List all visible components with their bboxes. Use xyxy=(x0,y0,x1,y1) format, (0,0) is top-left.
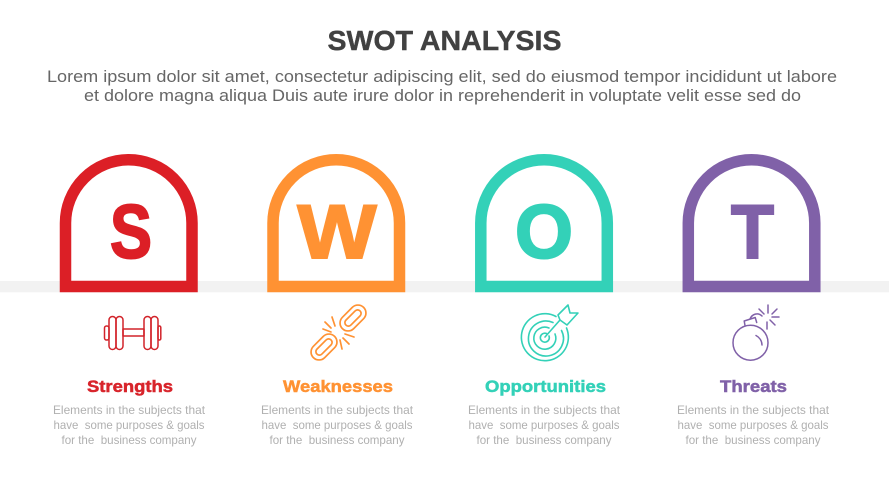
description: Threats: have some purposes & goals xyxy=(678,418,828,432)
panel: weaknesses xyxy=(261,160,414,447)
arch frame: W xyxy=(273,160,400,286)
description: Weaknesses: for the business company xyxy=(270,433,404,447)
icon: bomb xyxy=(733,305,779,360)
letter S: S xyxy=(110,190,152,275)
letter W: W xyxy=(298,190,377,275)
heading: Opportunities: Opportunities xyxy=(485,378,606,396)
description: Opportunities xyxy=(468,403,621,447)
description: Strengths xyxy=(53,403,206,447)
panel: strengths xyxy=(53,160,206,447)
panel: opportunities xyxy=(468,160,621,447)
description: Weaknesses: have some purposes & goals xyxy=(262,418,412,432)
description: Threats: for the business company xyxy=(686,433,820,447)
description: Strengths: for the business company xyxy=(62,433,196,447)
description: Opportunities: for the business company xyxy=(476,433,612,447)
heading: Threats: Threats xyxy=(720,378,787,396)
icon: target with arrow xyxy=(521,305,578,361)
description: Strengths: have some purposes & goals xyxy=(54,418,204,432)
arch frame: S xyxy=(66,160,192,286)
description: Threats: Elements in the subjects that xyxy=(677,403,830,417)
description: Strengths: Elements in the subjects that xyxy=(53,403,206,417)
subtitle text block xyxy=(47,68,837,105)
description: Threats xyxy=(677,403,830,447)
description: Weaknesses: Elements in the subjects that xyxy=(261,403,414,417)
heading: Strengths: Strengths xyxy=(87,378,173,396)
description: Opportunities: have some purposes & goals xyxy=(468,418,620,432)
letter T: T xyxy=(731,190,774,275)
subtitle text block: Lorem ipsum dolor sit amet, consectetur adipiscing elit, sed do eiusmod tempor incididunt ut labore xyxy=(47,68,837,86)
letter O: O xyxy=(515,190,573,275)
title: SWOT ANALYSIS xyxy=(328,25,562,56)
arch frame: O xyxy=(481,160,607,286)
icon: broken chain xyxy=(308,302,369,363)
subtitle text block: et dolore magna aliqua Duis aute irure dolor in reprehenderit in voluptate velit esse sed do xyxy=(84,87,801,105)
arch frame: T xyxy=(688,160,815,286)
panel: threats xyxy=(677,160,830,447)
description: Opportunities: Elements in the subjects that xyxy=(468,403,621,417)
icon: dumbbell xyxy=(104,316,161,350)
description: Weaknesses xyxy=(261,403,414,447)
heading: Weaknesses: Weaknesses xyxy=(283,378,393,396)
